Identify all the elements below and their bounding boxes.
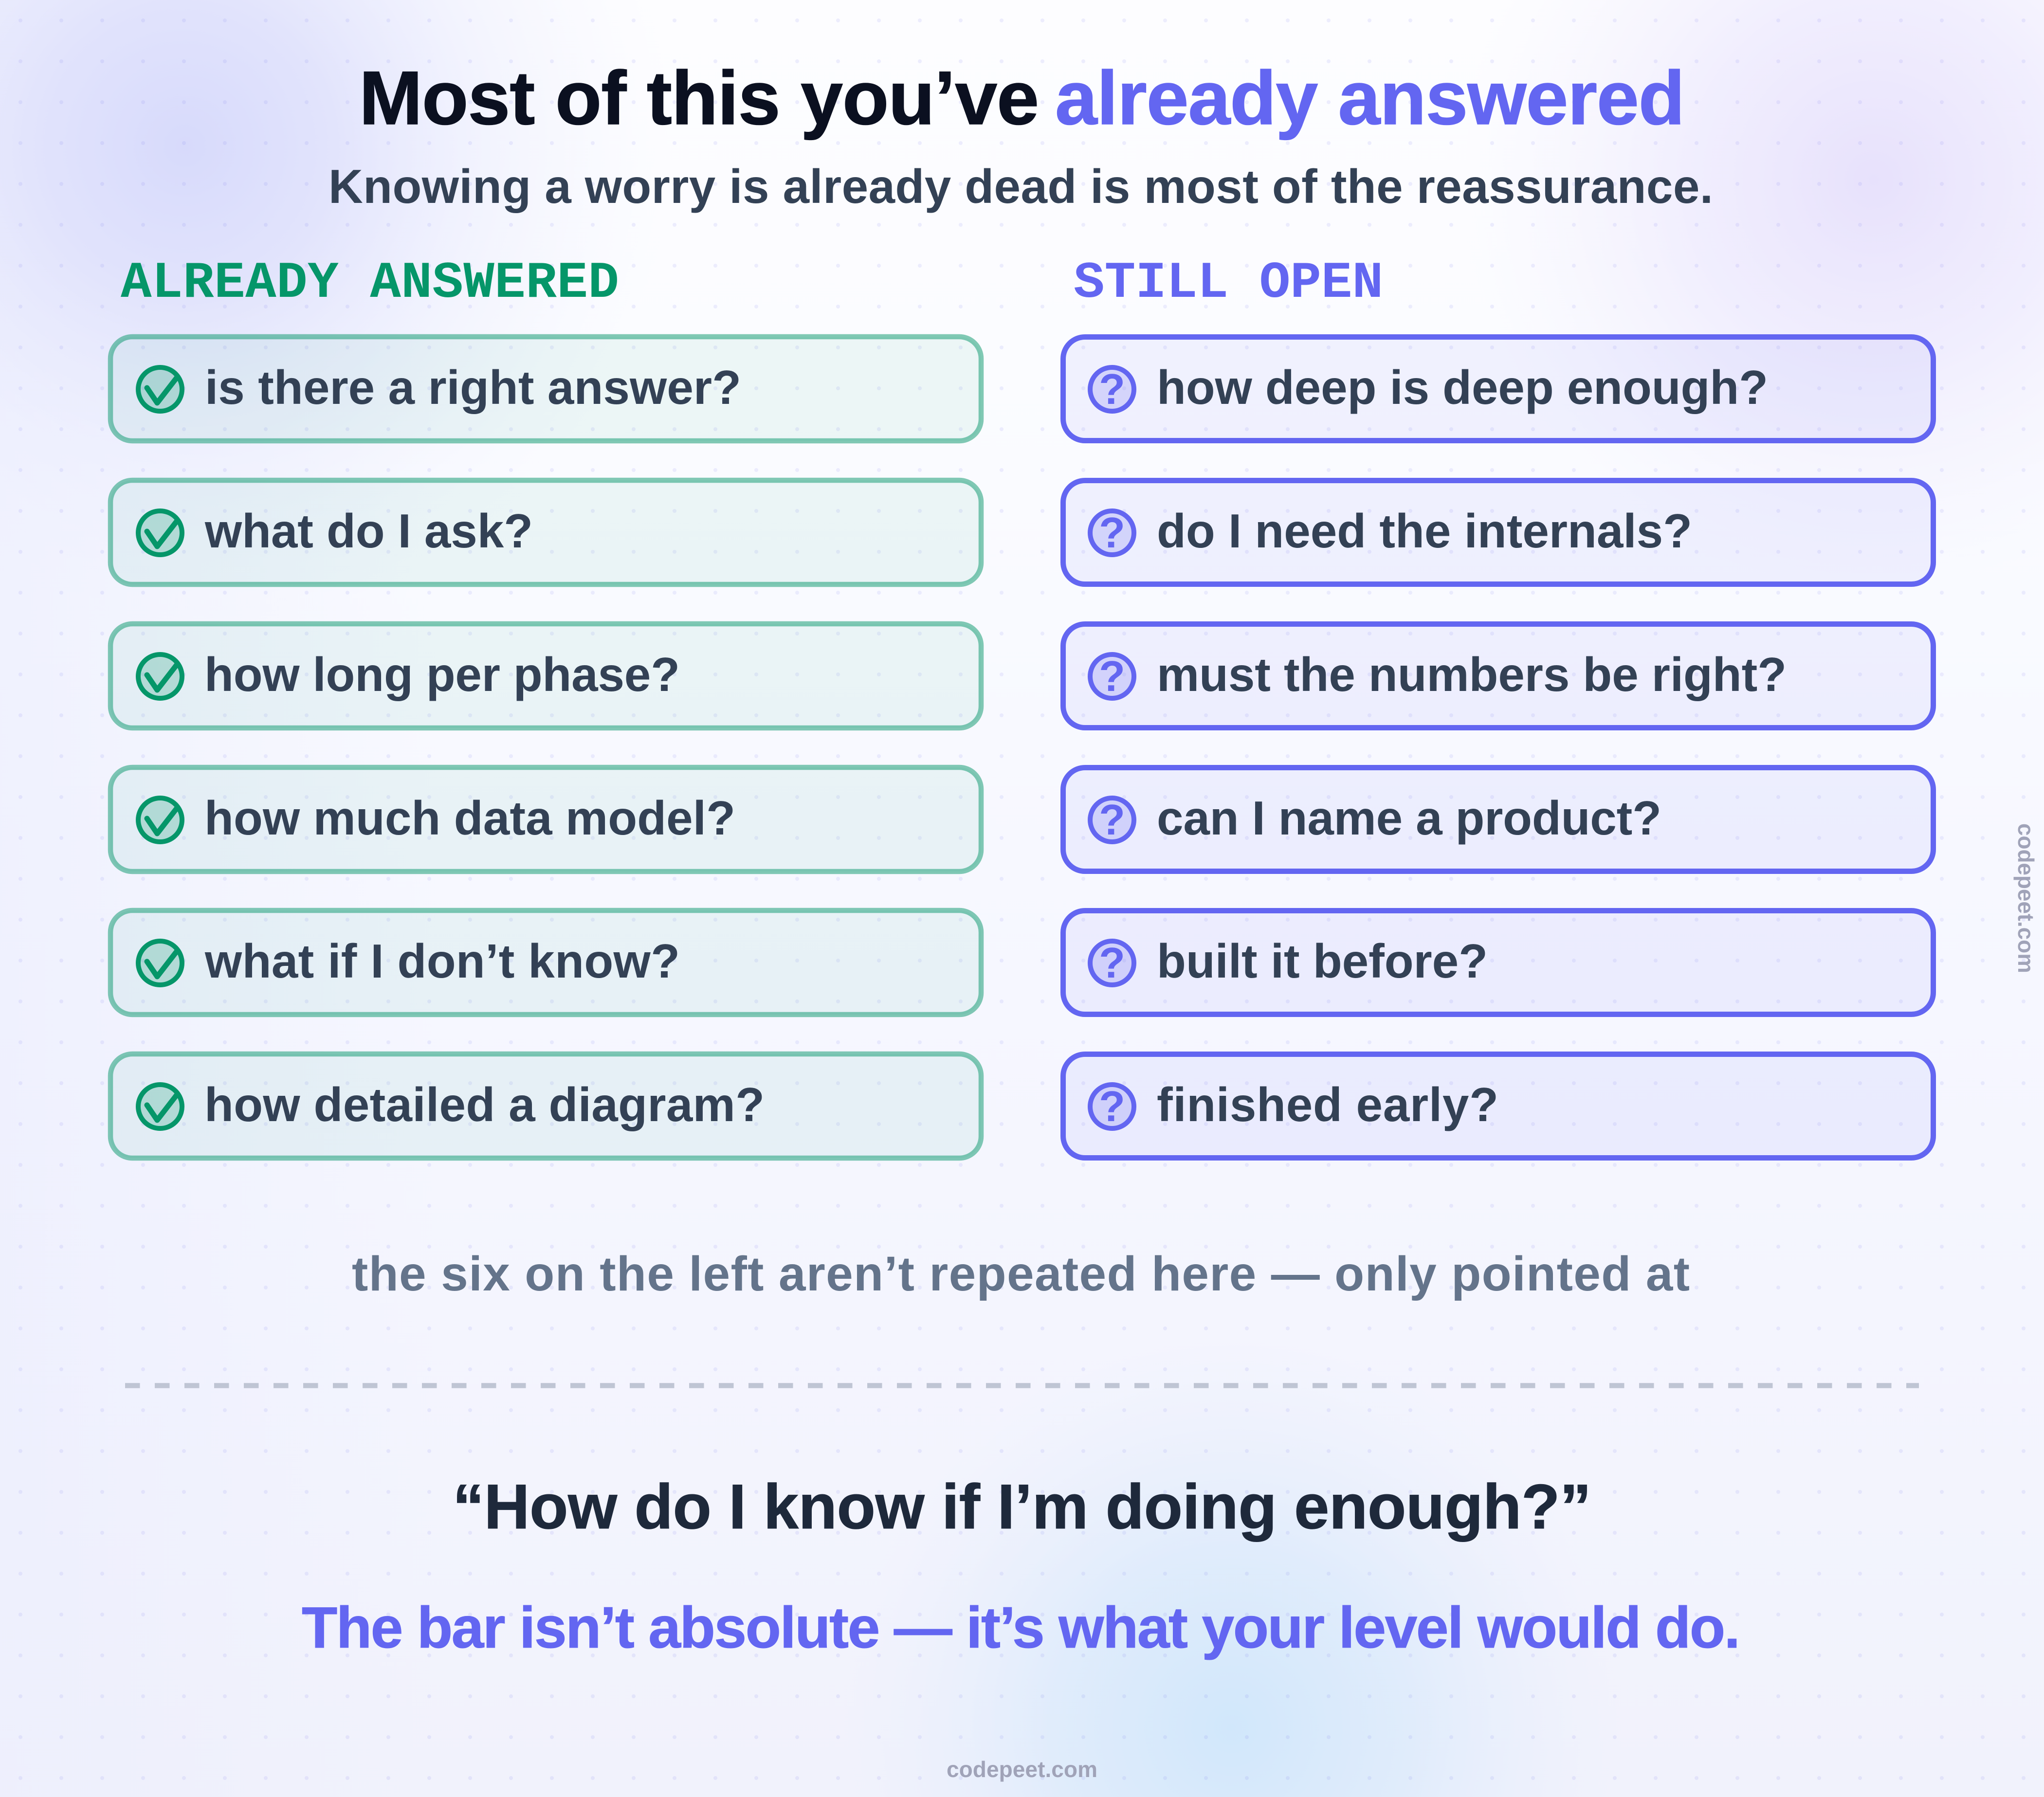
column heading: still open: STILL OPEN (1074, 254, 1383, 312)
card: what if I don't know: what if I don’t know? (204, 934, 680, 988)
card: can I name a product (1063, 768, 1933, 871)
title: already answered (1055, 56, 1685, 141)
card: how detailed a diagram: how detailed a diagram? (204, 1078, 765, 1131)
card: is there a right answer: is there a right answer? (205, 361, 741, 414)
card: can I name a product: ? (1099, 796, 1125, 844)
card: how much data model (110, 767, 981, 871)
card: how deep is deep enough: how deep is deep enough? (1157, 361, 1768, 414)
card: is there a right answer (110, 337, 981, 441)
card: what if I don't know (110, 910, 981, 1015)
card: how detailed a diagram (110, 1054, 981, 1158)
card: do I need the internals (1063, 481, 1933, 584)
card: built it before: built it before? (1157, 934, 1488, 988)
panel: already answered list (110, 337, 981, 1158)
card: how much data model: how much data model? (204, 791, 735, 845)
column heading: already answered: ALREADY ANSWERED (121, 254, 619, 312)
card: do I need the internals: ? (1099, 508, 1125, 557)
footer brand: codepeet.com (947, 1757, 1097, 1782)
card: must the numbers be right: ? (1099, 652, 1125, 700)
quoted question: “How do I know if I’m doing enough?” (453, 1471, 1591, 1542)
card: finished early: finished early? (1157, 1078, 1498, 1131)
card: finished early: ? (1099, 1082, 1125, 1130)
card: must the numbers be right: must the numbers be right? (1157, 648, 1787, 701)
card: how deep is deep enough (1063, 337, 1933, 441)
card: how long per phase (110, 624, 981, 728)
title (359, 56, 1685, 141)
card: what do I ask (110, 480, 981, 584)
card: how deep is deep enough: ? (1099, 365, 1125, 413)
card: built it before: ? (1099, 939, 1125, 987)
panel: still open list (1063, 337, 1933, 1158)
title: Most of this you’ve (359, 56, 1039, 141)
card: can I name a product: can I name a product? (1157, 791, 1661, 845)
card: do I need the internals: do I need the internals? (1157, 504, 1692, 558)
side brand, rotated: codepeet.com (2013, 823, 2039, 973)
card: finished early (1063, 1054, 1933, 1158)
card: built it before (1063, 911, 1933, 1014)
note below columns: the six on the left aren’t repeated here — only pointed at (352, 1247, 1690, 1301)
card: what do I ask: what do I ask? (204, 504, 533, 558)
card: how long per phase: how long per phase? (204, 648, 680, 701)
card: must the numbers be right (1063, 624, 1933, 728)
answer line: The bar isn’t absolute — it’s what your level would do. (302, 1595, 1740, 1660)
subtitle: Knowing a worry is already dead is most of the reassurance. (328, 160, 1713, 213)
